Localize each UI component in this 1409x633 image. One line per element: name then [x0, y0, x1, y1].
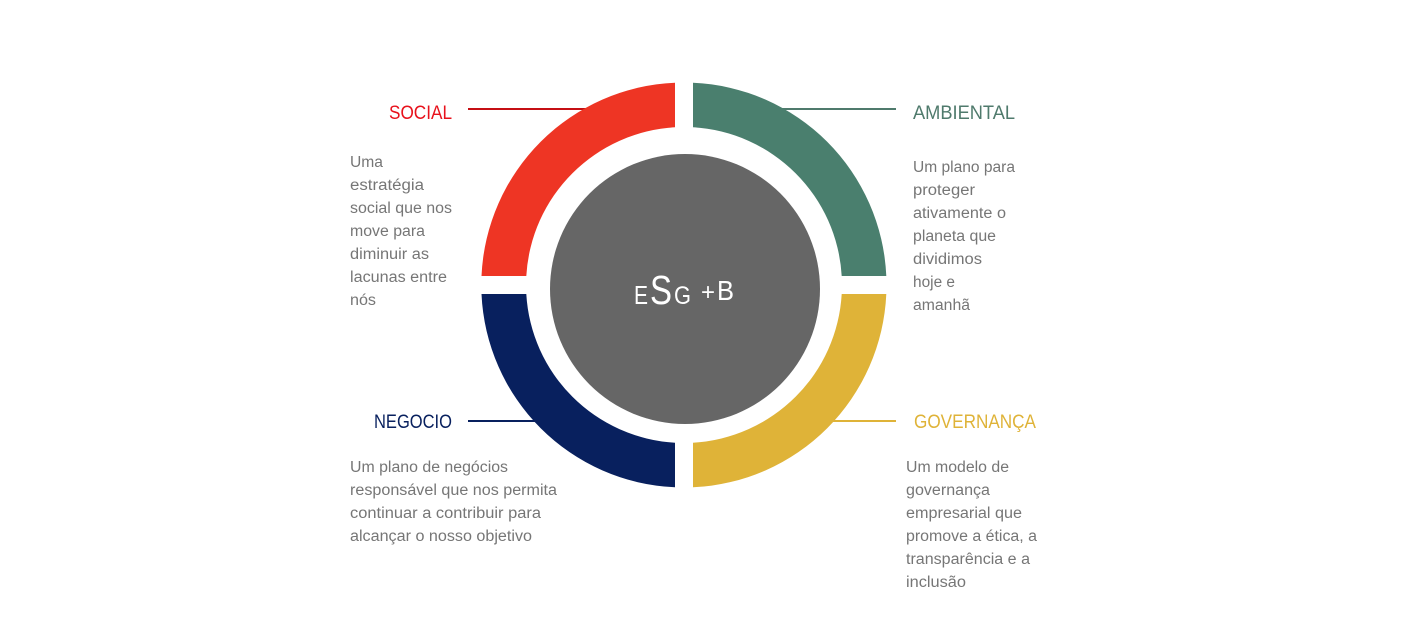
ring segment: social — [482, 83, 675, 276]
text block: governanca: transparência e a — [906, 551, 1030, 568]
leader line: governanca — [833, 420, 896, 422]
panel: ambiental — [693, 83, 1015, 314]
text block: governanca: promove a ética, a — [906, 528, 1037, 545]
center label: ESG +B: E — [634, 280, 648, 310]
center label: ESG +B: + — [701, 279, 715, 306]
ring segment: ambiental — [693, 83, 886, 276]
text block: social: lacunas entre — [350, 269, 447, 286]
text block: governanca — [906, 459, 1037, 591]
circle: center — [550, 154, 820, 424]
center label: ESG +B: B — [717, 275, 734, 306]
text block: negocio — [350, 459, 557, 545]
text block: social: estratégia — [350, 177, 424, 194]
center label: ESG +B: G — [674, 282, 691, 310]
text block: social: social que nos — [350, 200, 452, 217]
text block: social: nós — [350, 292, 376, 309]
text block: negocio: Um plano de negócios — [350, 459, 508, 476]
text block: negocio: alcançar o nosso objetivo — [350, 528, 532, 545]
ring segment: negocio — [482, 294, 675, 487]
leader line: social — [468, 108, 592, 110]
text block: ambiental: ativamente o — [913, 205, 1006, 222]
text block: negocio: continuar a contribuir para — [350, 505, 541, 522]
leader line: ambiental — [780, 108, 896, 110]
text block: governanca: inclusão — [906, 574, 966, 591]
text block: social — [350, 154, 452, 309]
text block: ambiental: planeta que — [913, 228, 996, 245]
heading: governanca: GOVERNANÇA — [914, 412, 1036, 433]
text block: ambiental: hoje e — [913, 274, 955, 291]
panel: social — [350, 83, 675, 309]
heading: ambiental: AMBIENTAL — [913, 103, 1015, 124]
panel: negocio — [350, 294, 675, 545]
heading: negocio: NEGOCIO — [374, 412, 452, 433]
text block: governanca: Um modelo de — [906, 459, 1009, 476]
panel: governanca — [693, 294, 1037, 591]
text block: ambiental: amanhã — [913, 297, 970, 314]
text block: social: diminuir as — [350, 246, 429, 263]
text block: social: Uma — [350, 154, 383, 171]
center label: ESG +B — [634, 267, 734, 313]
text block: ambiental: proteger — [913, 182, 975, 199]
text block: governanca: empresarial que — [906, 505, 1022, 522]
leader line: negocio — [468, 420, 536, 422]
ring segment: governanca — [693, 294, 886, 487]
heading: social: SOCIAL — [389, 103, 452, 124]
text block: governanca: governança — [906, 482, 990, 499]
text block: ambiental: dividimos — [913, 251, 982, 268]
text block: social: move para — [350, 223, 425, 240]
center circle — [550, 154, 820, 424]
text block: ambiental — [913, 159, 1015, 314]
text block: negocio: responsável que nos permita — [350, 482, 557, 499]
center label: ESG +B: S — [650, 267, 672, 313]
text block: ambiental: Um plano para — [913, 159, 1015, 176]
